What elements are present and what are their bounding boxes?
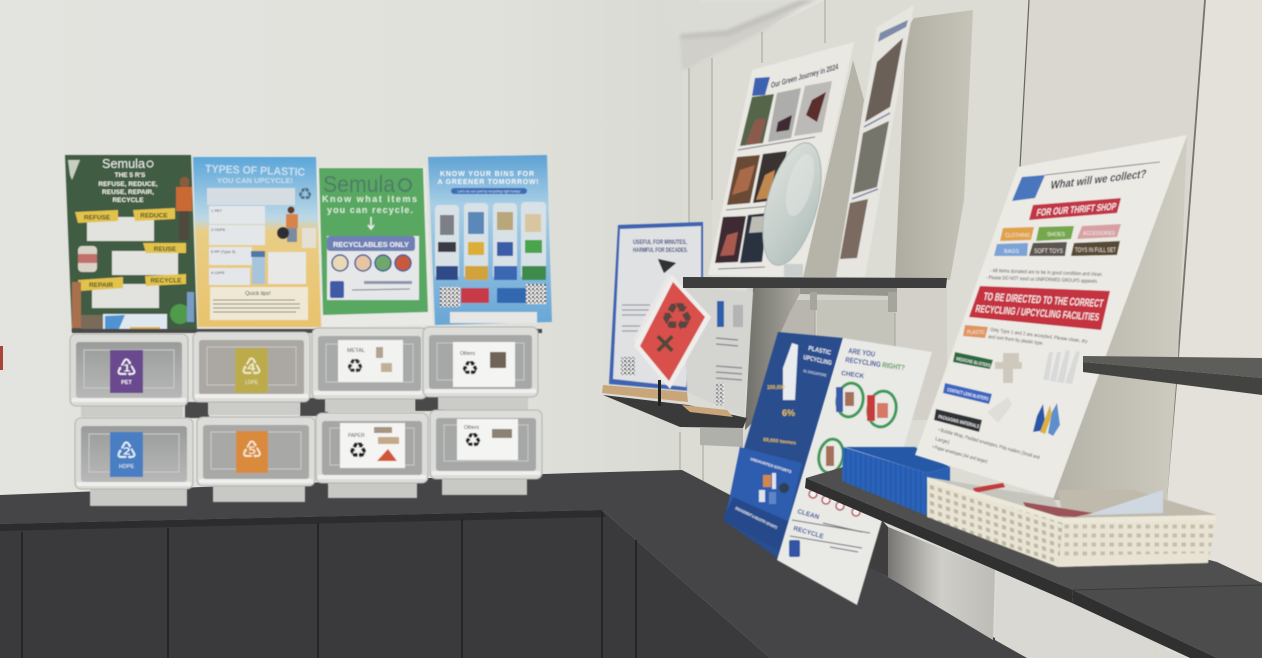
board: what will we collect: • Bubble Wrap, Padded envelopes, Poly mailers (Small and [937, 427, 1040, 461]
recycling symbol: ♻ [297, 185, 313, 205]
wall panels below long shelf [858, 505, 1188, 658]
board: are you recycling right: RECYCLING RIGHT? [845, 355, 906, 372]
board: what will we collect: • Paper envelopes (A4 and larger) [931, 444, 988, 465]
poster: the 5 R's: RECYCLE [150, 278, 182, 284]
label: others [457, 419, 518, 460]
ceiling soffit [660, 0, 816, 70]
label: PET: ♳ [116, 354, 137, 382]
poster: know what items you can recycle [317, 167, 433, 327]
poster: behind diamond [683, 285, 753, 417]
packaging materials tag: PACKAGING MATERIALS [938, 414, 980, 430]
poster: know your bins: KNOW YOUR BINS FOR [440, 171, 534, 178]
poster: the 5 R's: REDUCE [140, 212, 168, 220]
blue crate [842, 447, 950, 515]
label: LDPE [235, 348, 268, 393]
poster: know what items you can recycle: Know what items [322, 194, 417, 204]
board: plastic upcycling: ENGAGEMENT & INDUSTRY EFFORTS [735, 505, 778, 530]
board: plastic upcycling: UPCYCLING [803, 354, 832, 367]
category tags: ACCESSORIES [1083, 231, 1115, 237]
label: LDPE: ♶ [241, 353, 262, 381]
label: others: ♻ [464, 428, 482, 452]
category tags: BAGS [1004, 249, 1019, 255]
board: are you recycling right: CLEAN [796, 508, 820, 521]
lower long shelf [805, 465, 1262, 658]
label: metal: METAL [347, 348, 365, 354]
board: our green journey [708, 42, 854, 277]
poster: the 5 R's: REUSE, REPAIR, [102, 189, 154, 196]
poster: the 5 R's: REUSE [154, 246, 177, 253]
label: HDPE: HDPE [119, 464, 134, 470]
board: our green journey: Our Green Journey in 2024 [771, 62, 839, 90]
check icons [816, 381, 899, 475]
label: metal [338, 340, 403, 382]
red no-recycling diamond sign: ♻ [660, 295, 694, 339]
white perforated basket [927, 477, 1217, 567]
poster: types of plastic: 2 HDPE [211, 227, 226, 232]
storage bin: others top [423, 327, 538, 410]
board: plastic upcycling: 59,000 tonnes [763, 437, 797, 446]
plastic tag: PLASTIC [967, 330, 985, 336]
four bin columns [435, 202, 546, 280]
blue leaflet [103, 314, 167, 332]
storage bin: PP [197, 417, 315, 502]
label: others: Others [464, 425, 480, 431]
label: PP: ♷ [241, 436, 263, 464]
small caution icons [809, 490, 860, 516]
poster: know what items you can recycle: Semula [323, 171, 395, 197]
people and bin illustrations [72, 282, 194, 330]
board: plastic upcycling: 100,000 [767, 385, 785, 391]
banner: for our thrift shop [1029, 198, 1121, 220]
shadow behind collection board [1053, 136, 1187, 500]
poster: types of plastic [193, 157, 321, 327]
poster: know your bins: Let's do our part by recycling right today! [458, 190, 520, 194]
poster: types of plastic: Quick tips! [245, 291, 271, 297]
lower left shelf [603, 395, 747, 428]
poster: know your bins [428, 155, 552, 325]
category tags: CLOTHING [1005, 233, 1030, 239]
poster: types of plastic: 5 PP (Type 5) [211, 249, 236, 254]
label: others [453, 342, 515, 387]
label: others: ♻ [461, 356, 479, 380]
glass plate [752, 137, 832, 277]
poster: the 5 R's: THE 5 R'S [115, 172, 146, 179]
red no-recycling diamond sign: × [655, 325, 675, 363]
clear bottle icons [1043, 350, 1080, 384]
board: are you recycling right: RECYCLE [792, 525, 825, 541]
plastic tag [963, 325, 1088, 347]
storage bin: HDPE [75, 418, 193, 506]
label: paper: PAPER [348, 433, 365, 439]
banner: to be directed [969, 286, 1110, 330]
contact lens blisters tag: CONTACT LENS BLISTERS [947, 387, 989, 403]
person and bottle illustrations [251, 206, 316, 284]
poster: the 5 R's: Semula [102, 156, 146, 171]
label: PET [110, 350, 143, 393]
right wall panels [682, 0, 1262, 658]
contact lens blisters tag [943, 383, 992, 404]
poster: the 5 R's: REFUSE [84, 214, 111, 222]
label: paper: ♻ [348, 439, 368, 464]
storage bin: PET [70, 334, 188, 417]
label: HDPE [110, 432, 143, 477]
poster: types of plastic: 4 LDPE [211, 270, 225, 275]
label: metal: ♻ [346, 354, 364, 378]
board: what will we collect: - Please DO NOT send us UNIFORMED GROUPS apparels. [986, 275, 1098, 285]
wall shadow behind upper boards [895, 10, 973, 280]
poster: know your bins: A GREENER TOMORROW! [438, 179, 538, 186]
board: what will we collect: What will we collect? [1049, 168, 1147, 192]
photos [715, 81, 832, 263]
cabinets [0, 510, 770, 658]
poster: useful for minutes: HARMFUL FOR DECADES. [633, 248, 688, 254]
label: others: Others [460, 351, 476, 357]
board: photo collage [836, 5, 914, 277]
bottle graphic [783, 343, 798, 400]
poster: know what items you can recycle: RECYCLABLES ONLY [333, 240, 409, 249]
wall panel seams [680, 0, 1205, 500]
counter top [0, 470, 1030, 658]
board: what will we collect: Large) [934, 436, 950, 446]
storage bin: paper [316, 413, 428, 498]
small red object at edge [0, 346, 3, 370]
storage bin: others bottom [430, 410, 542, 495]
poster: types of plastic: 1 PET [211, 208, 223, 213]
board: plastic upcycling: 6% [782, 408, 795, 418]
down arrow [368, 217, 374, 229]
shadow beneath small shelf [700, 428, 743, 447]
contact lens blister icon [987, 397, 1012, 423]
packaging materials tag [934, 409, 982, 432]
plastic tag: and sort them by plastic type. [988, 334, 1044, 347]
banner: to be directed: RECYCLING / UPCYCLING FACILITIES [974, 303, 1100, 324]
poster: types of plastic: TYPES OF PLASTIC [205, 163, 305, 179]
coffee cup icon [78, 246, 97, 272]
medicine blisters tag [953, 352, 993, 369]
medicine blisters tag: MEDICINE BLISTERS [956, 356, 992, 369]
board: are you recycling right: ARE YOU [848, 346, 876, 359]
storage bin: metal [312, 328, 427, 412]
category tags: TOYS IN FULL SET [1075, 248, 1116, 254]
shadow between journey boards [803, 60, 864, 277]
blister icon [995, 353, 1022, 383]
small right shelf [1083, 356, 1262, 395]
storage bin: LDPE [193, 332, 310, 415]
person illustration [176, 177, 192, 240]
poster: know what items you can recycle: you can recycle. [327, 205, 413, 215]
category tags [994, 224, 1121, 256]
poster: useful for minutes: USEFUL FOR MINUTES, [633, 240, 687, 246]
wooden stand [602, 380, 733, 417]
left wall [0, 0, 700, 510]
QR codes [440, 284, 546, 307]
poster: the 5 R's: REFUSE, REDUCE, [98, 181, 158, 188]
category tags: SOFT TOYS [1034, 249, 1063, 255]
poster: the 5 R's: RECYCLE [112, 197, 144, 204]
dark gaps behind bins [72, 329, 542, 418]
board: plastic upcycling: PLASTIC [808, 345, 832, 357]
board: plastic upcycling: IN SINGAPORE [803, 368, 828, 378]
red no-recycling diamond sign [633, 259, 711, 389]
poster: types of plastic: YOU CAN UPCYCLE! [217, 176, 293, 185]
board: are you recycling right: CHECK [841, 370, 865, 380]
label: paper [340, 423, 405, 468]
banner: for our thrift shop: FOR OUR THRIFT SHOP [1035, 202, 1117, 219]
board: are you recycling right [777, 338, 932, 605]
wall beneath upper shelf [745, 288, 947, 430]
label: HDPE: ♴ [116, 437, 137, 465]
poster: useful for minutes [609, 222, 703, 391]
board: plastic upcycling [723, 332, 843, 560]
banner: to be directed: TO BE DIRECTED TO THE CORRECT [982, 291, 1104, 310]
four material icons [332, 255, 411, 271]
poster: the 5 R's [65, 155, 197, 332]
coloured bottle icons [1033, 403, 1060, 436]
poster: the 5 R's: REPAIR [89, 282, 113, 289]
label: PET: PET [121, 380, 132, 386]
board: what will we collect [915, 135, 1187, 498]
category tags: SHOES [1047, 232, 1065, 238]
board: what will we collect: - All items donated are to be in good condition and clean. [990, 268, 1103, 278]
plastic tag: Only Type 1 and 2 are accepted. Please clean, dry [990, 327, 1088, 345]
board: plastic upcycling: UNDAUNTED EFFORTS [750, 456, 792, 474]
upper shelf [683, 277, 947, 288]
label: LDPE: LDPE [245, 380, 259, 386]
